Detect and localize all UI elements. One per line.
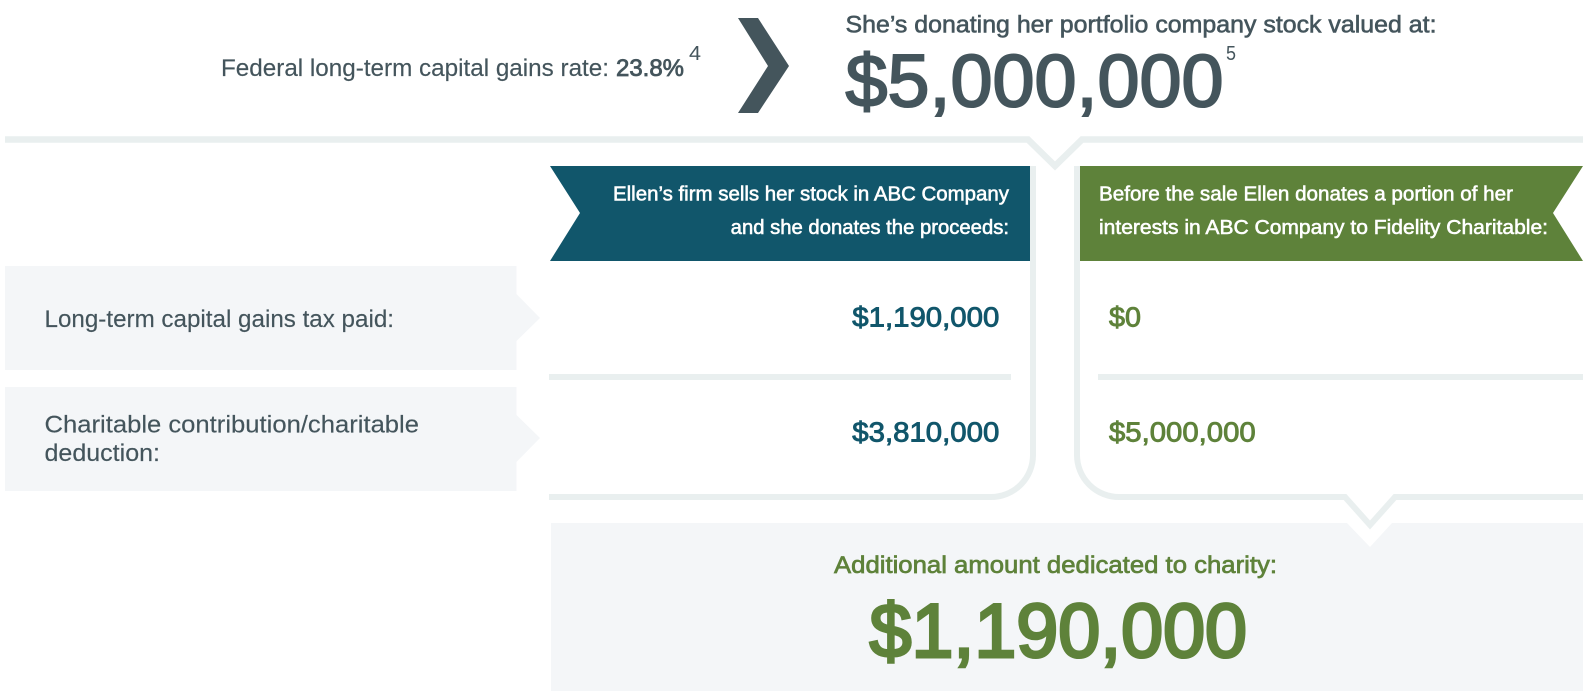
panel: additional amount result: Additional amount dedicated to charity: [834,552,1277,579]
panel: additional amount result: $1,190,000 [870,589,1247,674]
header: federal rate: Federal long-term capital gains rate: [221,55,609,82]
header: donated stock value: 5 [1226,43,1236,65]
header: donated stock value [846,12,1436,123]
panel: charitable contribution label [5,387,540,491]
header: federal rate: 4 [689,42,701,65]
header: federal rate [221,42,701,82]
panel: capital gains label [5,266,540,370]
panel: green banner: Before the sale Ellen donates a portion of her [1099,184,1513,206]
values: sell stock column: $3,810,000 [852,416,999,448]
panel: charitable contribution label: deduction: [44,440,160,467]
values: sell stock column: $1,190,000 [852,302,999,333]
row dividers [549,374,1583,380]
panel: capital gains label: Long-term capital gains tax paid: [44,306,394,333]
panel: additional amount result [551,523,1583,691]
values: donate stock column: $0 [1109,302,1141,333]
values: donate stock column [1109,302,1256,448]
header: federal rate: 23.8% [616,55,684,82]
right column outline [1077,166,1583,525]
header: donated stock value: She’s donating her portfolio company stock valued at: [846,12,1436,39]
values: sell stock column [852,302,999,448]
top bracket line [5,140,1583,166]
icon: chevron arrow [738,18,789,113]
panel: charitable contribution label: Charitable contribution/charitable [44,412,419,439]
left column outline [549,166,1033,497]
panel: blue banner: Ellen’s firm sells her stock in ABC Company [613,184,1009,206]
header: donated stock value: $5,000,000 [846,40,1224,122]
panel: green banner [1080,166,1583,261]
panel: blue banner: and she donates the proceeds: [731,217,1009,239]
panel: green banner: interests in ABC Company to Fidelity Charitable: [1099,217,1548,239]
panel: blue banner [550,166,1030,261]
values: donate stock column: $5,000,000 [1109,416,1256,448]
